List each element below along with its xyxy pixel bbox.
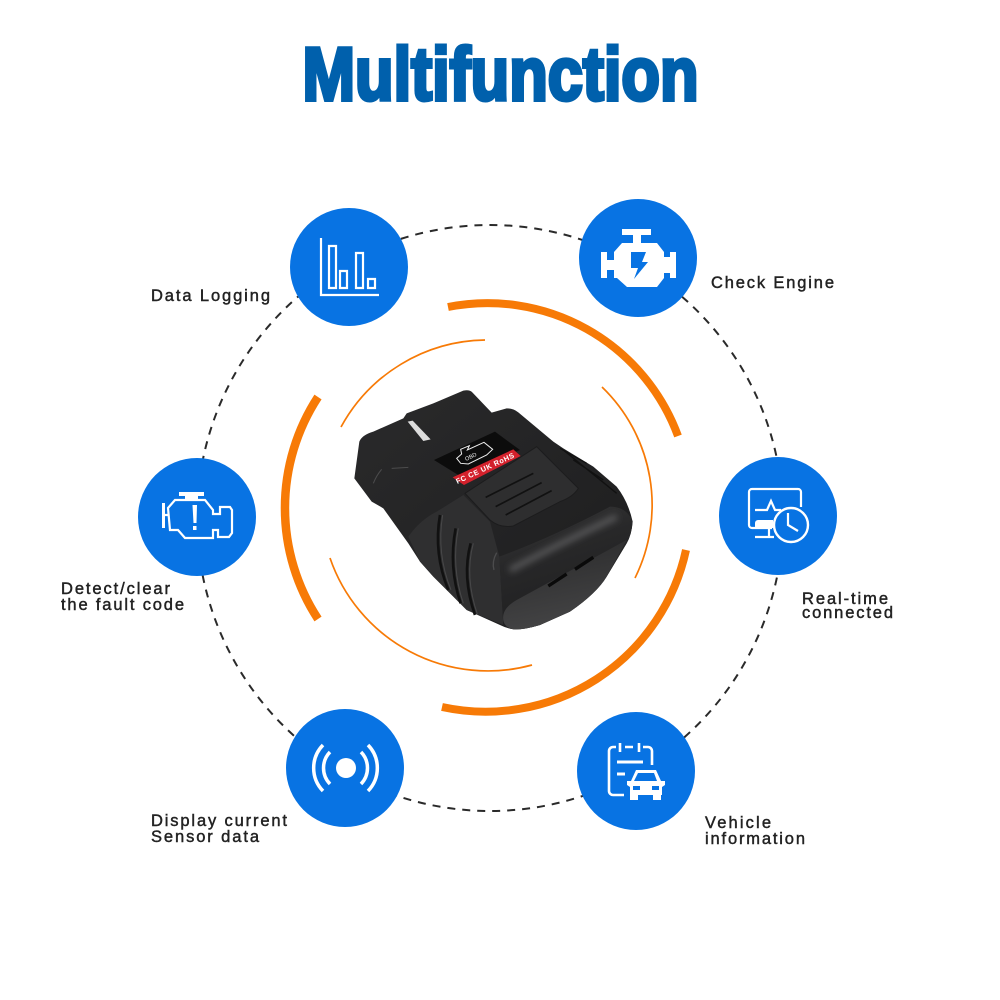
icon: fault code engine [138, 458, 256, 576]
icon: sensor data [286, 709, 404, 827]
icon: data logging [290, 208, 408, 326]
label: check engine: Check Engine [711, 274, 834, 292]
label: display sensor data [151, 812, 287, 846]
label: real-time connected: connected [802, 604, 893, 622]
label: vehicle information: Vehicle [705, 814, 771, 832]
label: real-time connected: Real-time [802, 590, 888, 608]
label: data logging: Data Logging [151, 287, 270, 305]
label: detect/clear [61, 580, 184, 614]
label: real-time connected [802, 590, 893, 622]
dashed ring [197, 225, 783, 811]
orange arcs [285, 303, 686, 712]
icon: check engine [579, 199, 697, 317]
label: display sensor data: Sensor data [151, 828, 260, 846]
label: vehicle information: information [705, 830, 805, 848]
icon: vehicle information [577, 712, 695, 830]
device label: engine badge: OBD [464, 452, 478, 463]
device label: engine badge: FC CE UK RoHS [454, 451, 516, 486]
label: display sensor data: Display current [151, 812, 287, 830]
label: detect/clear: the fault code [61, 596, 184, 614]
device vents and grooves [373, 448, 617, 615]
label: vehicle information [705, 814, 805, 848]
title: Multifunction [302, 32, 698, 116]
icon: real-time monitor [719, 457, 837, 575]
label: detect/clear: Detect/clear [61, 580, 170, 598]
device: OBD scanner [354, 390, 633, 629]
device label: engine badge [434, 432, 521, 486]
